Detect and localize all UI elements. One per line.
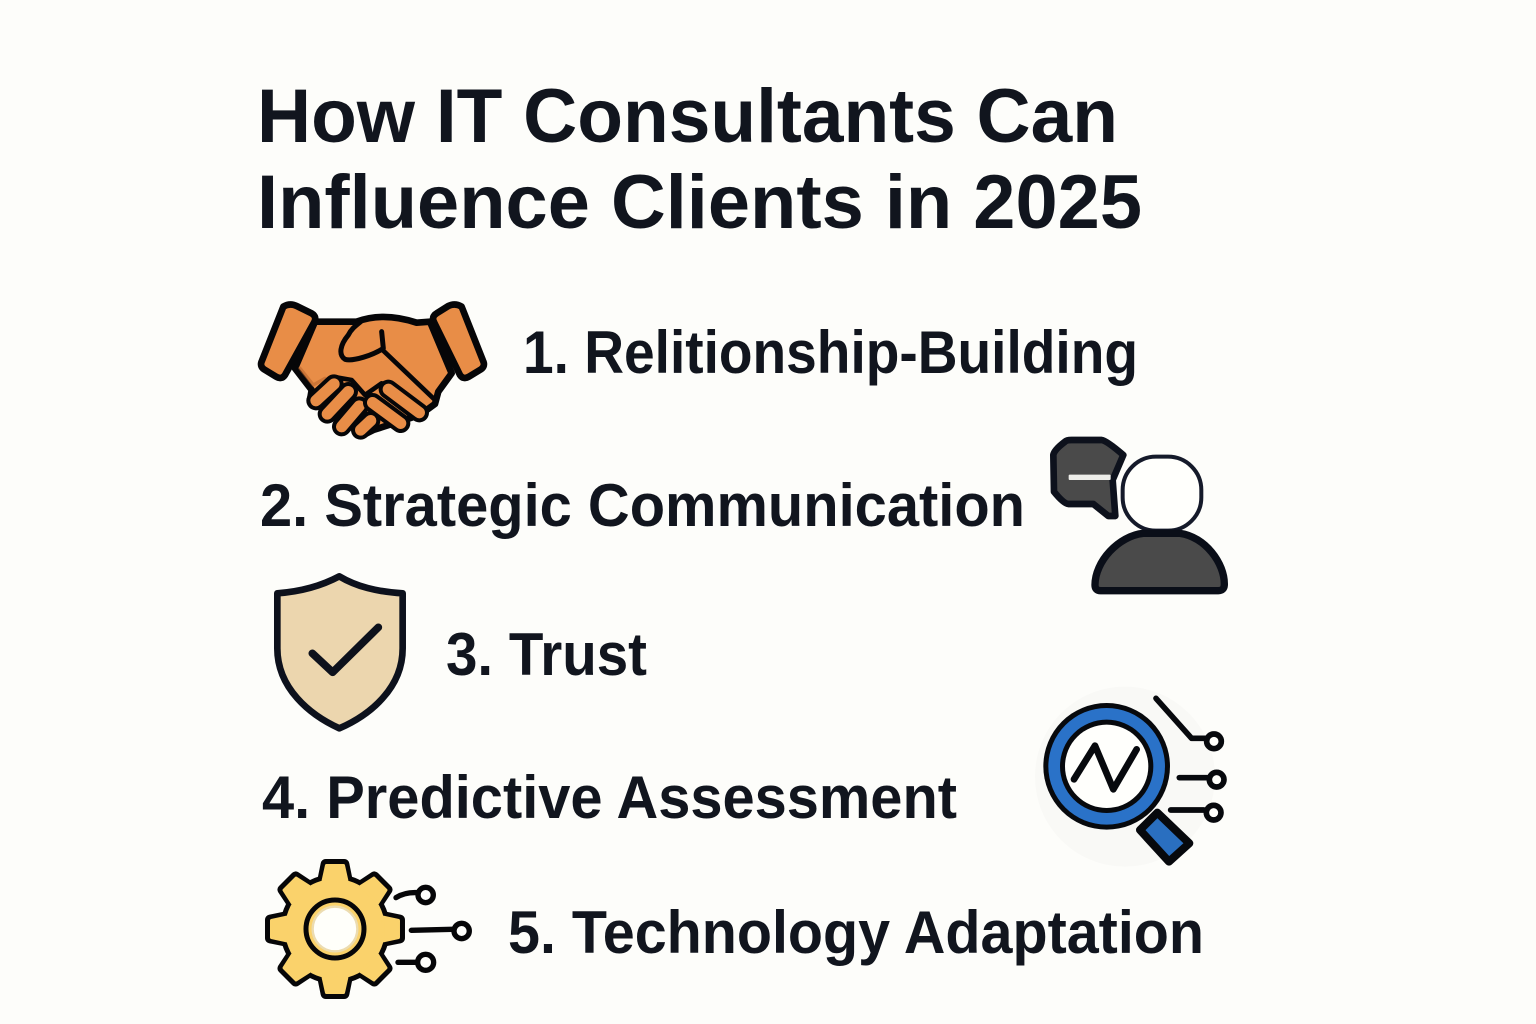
icon: gear with nodes <box>270 864 469 994</box>
person head <box>1123 457 1201 531</box>
title <box>257 74 1142 245</box>
icon: handshake <box>261 304 484 435</box>
check mark <box>312 627 378 672</box>
person body <box>1095 533 1224 591</box>
gear nodes <box>396 887 469 970</box>
icon: shield with check <box>277 576 403 728</box>
magnifier handle <box>1140 813 1189 862</box>
icon: person with speech bubble <box>1053 440 1224 591</box>
bubble dash <box>1069 475 1111 480</box>
heading: item 5: 5. Technology Adaptation <box>508 899 1204 966</box>
heading: item 4: 4. Predictive Assessment <box>262 764 957 831</box>
magnifier lens <box>1043 703 1170 830</box>
thumb <box>341 322 383 360</box>
data nodes <box>1156 698 1224 820</box>
gear <box>270 864 400 994</box>
speech bubble <box>1053 440 1123 516</box>
heading: item 2: 2. Strategic Communication <box>260 472 1025 539</box>
heading: item 3: 3. Trust <box>446 621 647 688</box>
icon: magnifier with data nodes <box>1035 687 1224 867</box>
title: How IT Consultants Can <box>257 74 1118 159</box>
title: Influence Clients in 2025 <box>257 160 1142 245</box>
heading: item 1: 1. Relitionship-Building <box>523 319 1138 386</box>
